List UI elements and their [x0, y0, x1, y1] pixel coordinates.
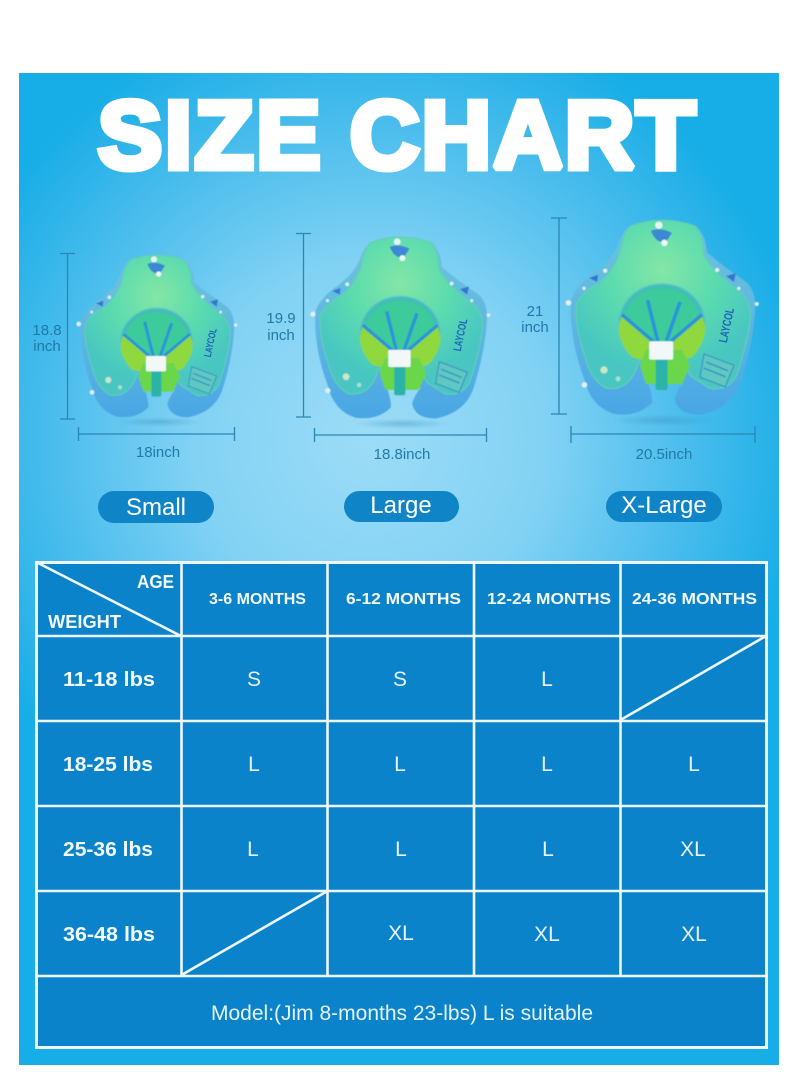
size pill: x-large: X-Large [621, 492, 707, 519]
dimensions: small: 18inch [136, 444, 180, 461]
weight labels [63, 669, 155, 946]
size values: L [688, 753, 700, 776]
size values: L [395, 838, 407, 861]
size values: S [247, 668, 261, 691]
product: large float: LAYCOL [452, 318, 470, 352]
footer note: Model:(Jim 8-months 23-lbs) L is suitable [211, 1002, 593, 1025]
table header: WEIGHT [48, 612, 121, 632]
title: CHART [350, 82, 697, 189]
weight labels: 36-48 lbs [63, 924, 155, 946]
table header [48, 572, 757, 632]
size values: XL [681, 923, 707, 946]
weight labels: 11-18 lbs [63, 669, 155, 691]
dimensions: large: inch [267, 327, 295, 344]
size values: L [394, 753, 406, 776]
size values: S [393, 668, 407, 691]
dimensions: large [266, 234, 486, 463]
dimensions: small: 18.8 [32, 322, 62, 339]
title: SIZE [98, 82, 323, 189]
table header: 12-24 MONTHS [487, 591, 611, 608]
size values: L [248, 753, 260, 776]
product: x-large float: LAYCOL [716, 306, 737, 344]
product: small float [76, 255, 237, 427]
size values: L [541, 753, 553, 776]
weight labels: 25-36 lbs [63, 839, 153, 861]
dimensions: small: inch [33, 338, 61, 355]
dimensions: x-large [521, 218, 755, 463]
size values: L [247, 838, 259, 861]
dimensions: small [32, 254, 234, 461]
dimensions: x-large: inch [521, 319, 549, 336]
size values: XL [388, 922, 414, 945]
size values: L [541, 668, 553, 691]
size pill: large [344, 491, 459, 522]
title [98, 82, 697, 189]
weight labels: 18-25 lbs [63, 754, 153, 776]
dimensions: x-large: 20.5inch [636, 446, 692, 463]
size pill: large: Large [370, 492, 432, 519]
size pill: small: Small [126, 494, 186, 521]
dimensions: x-large: 21 [527, 303, 543, 320]
size values: XL [534, 923, 560, 946]
table header: AGE [137, 572, 174, 592]
size pill: x-large [606, 491, 722, 522]
table header: 24-36 MONTHS [632, 591, 757, 608]
size values: L [542, 838, 554, 861]
table header: 3-6 MONTHS [209, 591, 306, 608]
dimensions: large: 18.8inch [374, 446, 430, 463]
size values [247, 668, 707, 946]
size table [36, 562, 766, 1048]
dimensions: large: 19.9 [266, 310, 296, 327]
size pill: small [98, 491, 214, 523]
size values: XL [680, 838, 706, 861]
product: x-large float [566, 220, 759, 426]
product: large float [310, 236, 490, 429]
table header: 6-12 MONTHS [346, 591, 461, 608]
product: small float: LAYCOL [203, 327, 220, 358]
